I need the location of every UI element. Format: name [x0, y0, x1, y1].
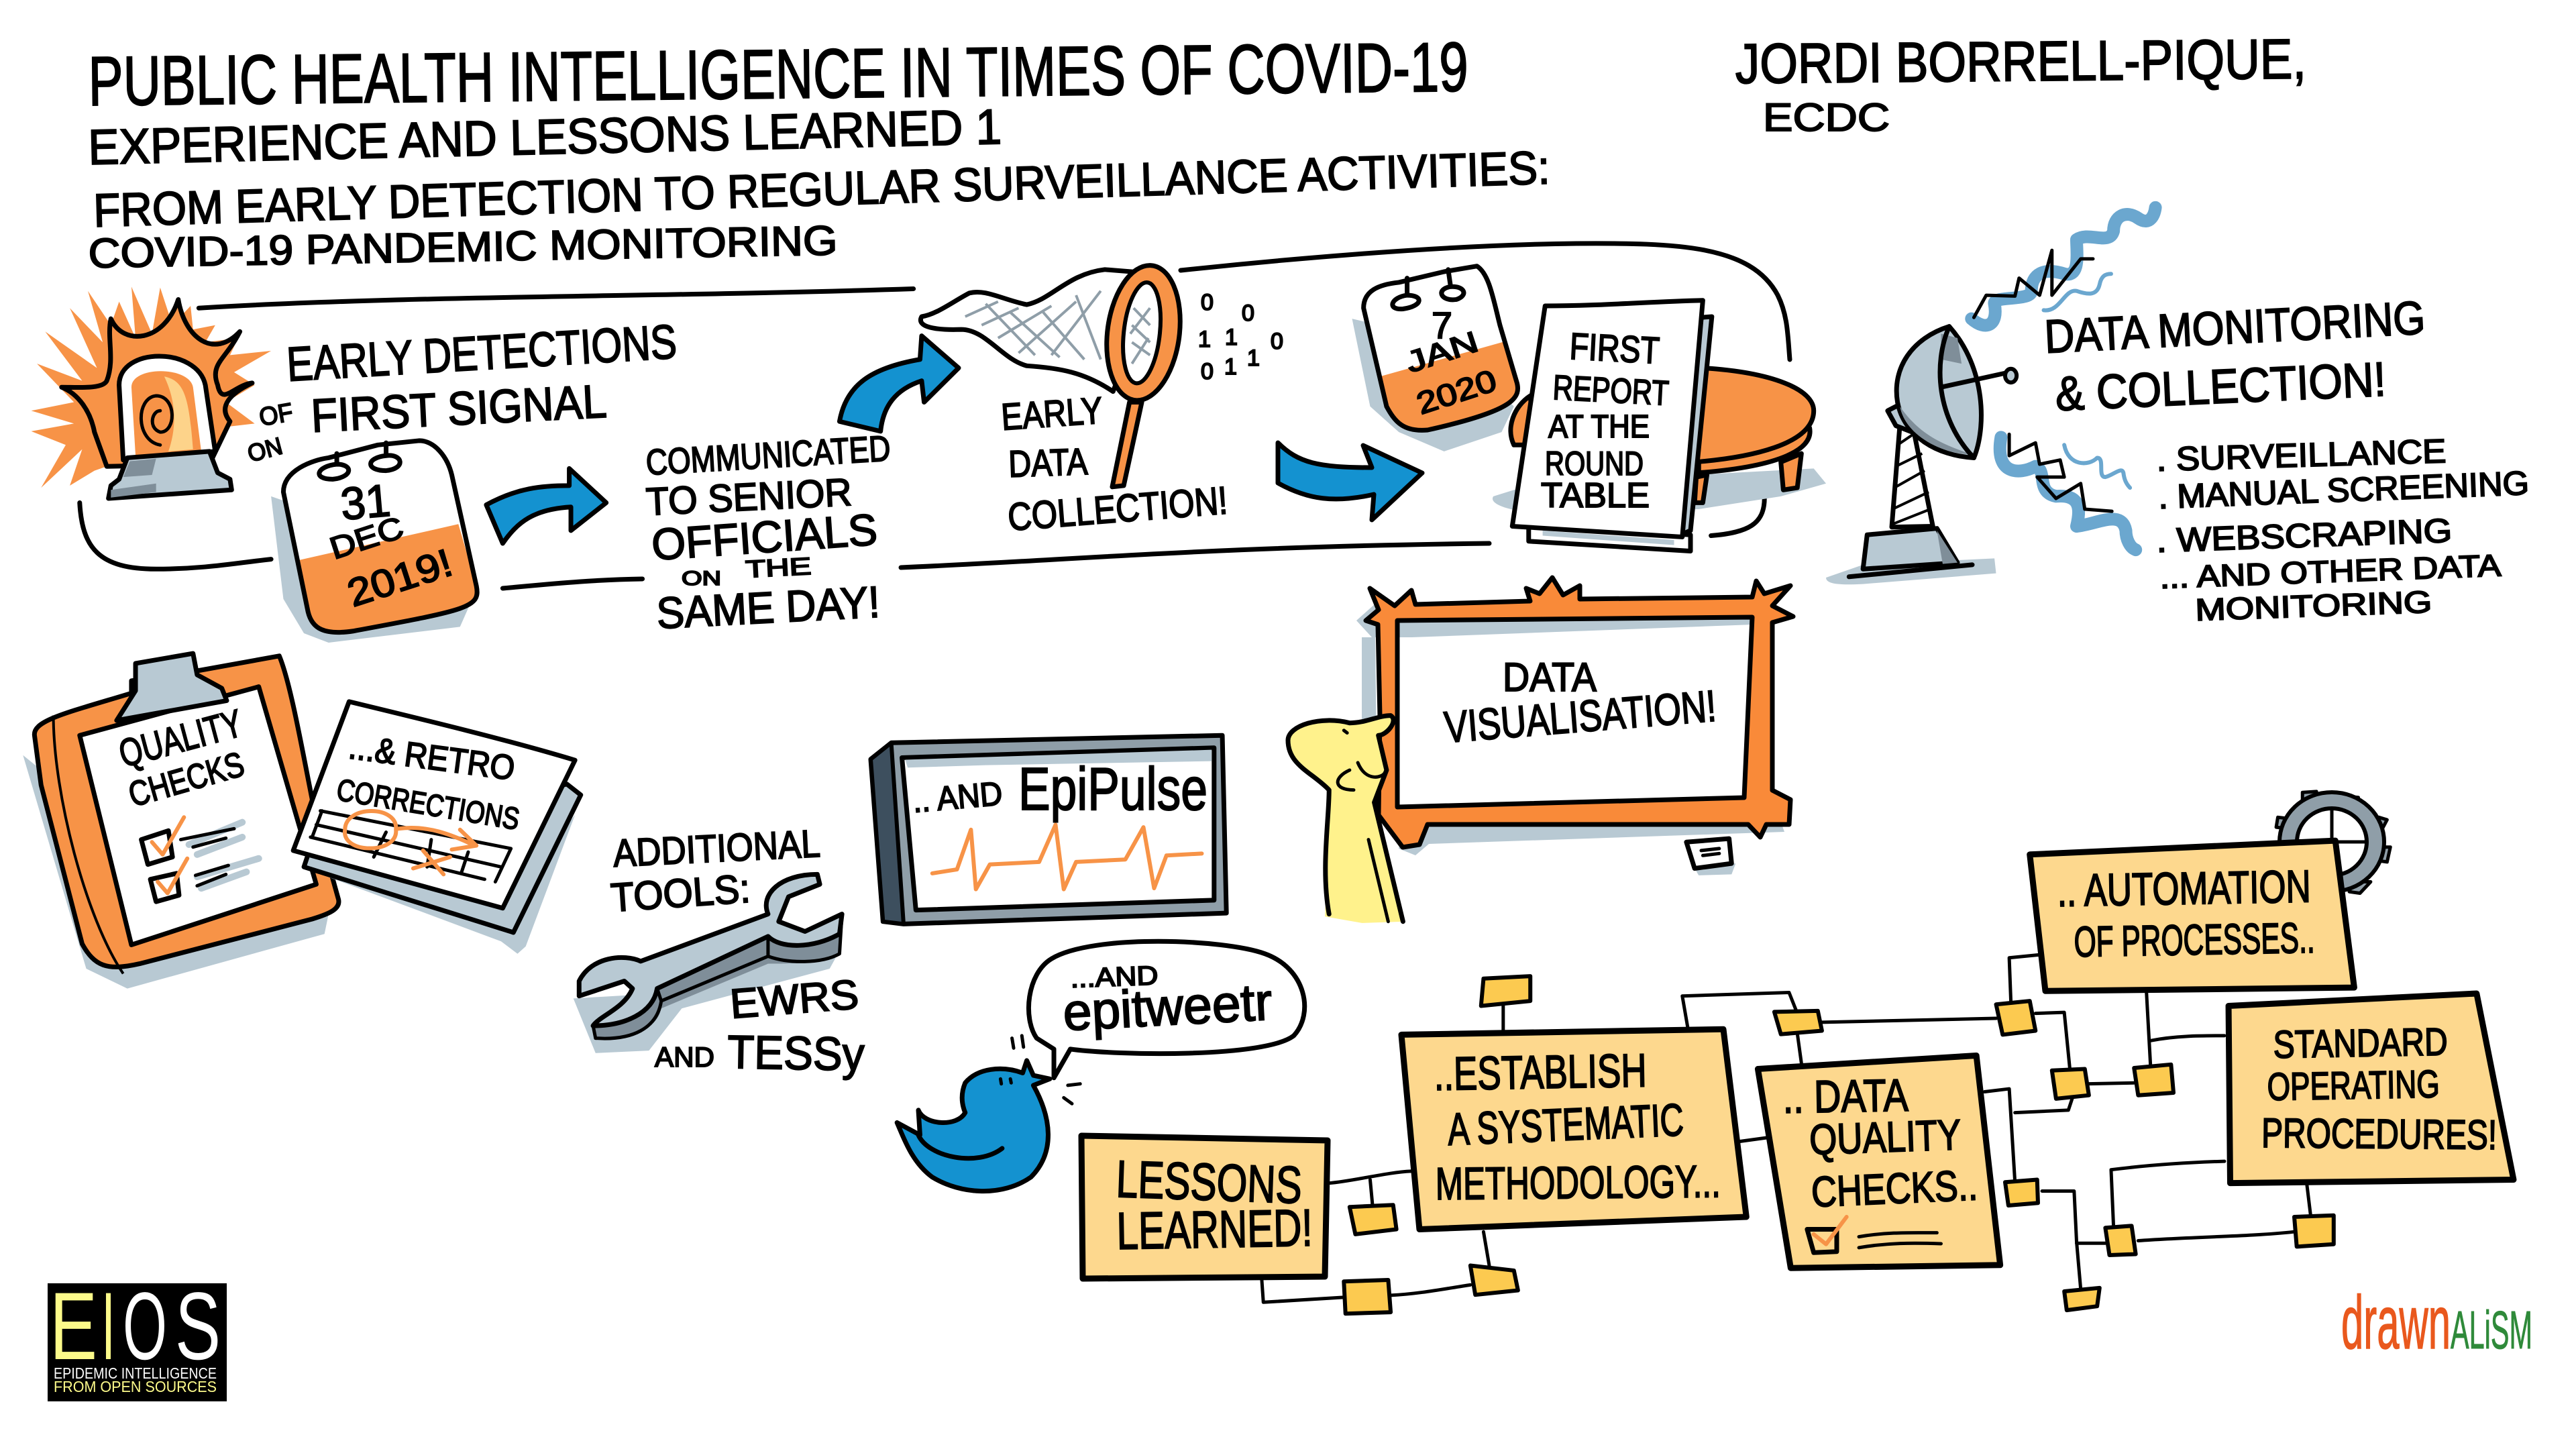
text: communicated to senior officials	[645, 428, 892, 638]
box: automation of processes: .. AUTOMATION	[2057, 861, 2311, 916]
icon: butterfly net with data: 1	[1198, 327, 1211, 352]
text: additional tools: ADDITIONAL	[612, 822, 821, 875]
speech bubble: epitweetr: ...AND	[1070, 961, 1159, 994]
box: standard operating procedures	[2229, 994, 2514, 1183]
icon: calendar 31 Dec 2019: 31	[339, 475, 392, 530]
icon: butterfly net with data: 0	[1242, 301, 1254, 326]
text: early detections of first signal: ON	[244, 432, 285, 468]
icon: person looking at frame	[1288, 716, 1405, 923]
icon: alarm light	[32, 286, 271, 498]
icon: wrench	[574, 874, 842, 1053]
icon: butterfly net with data: 0	[1271, 329, 1283, 354]
icon: small note under frame	[1686, 839, 1735, 875]
icon: butterfly net with data: 1	[1224, 354, 1237, 380]
logo: EIOS: FROM OPEN SOURCES	[54, 1378, 217, 1395]
author credit: ECDC	[1763, 96, 1890, 140]
box: establish a systematic methodology: A SYSTEMATIC	[1446, 1094, 1684, 1155]
icon: automation gear	[2276, 792, 2390, 894]
box: standard operating procedures: OPERATING	[2267, 1063, 2440, 1109]
logo: EIOS: E	[50, 1273, 97, 1380]
logo: drawnalism: drawn	[2341, 1281, 2451, 1364]
logo: EIOS	[48, 1273, 227, 1401]
box: lessons learned: LESSONS	[1115, 1149, 1303, 1215]
speech bubble: epitweetr	[1028, 941, 1305, 1078]
box: lessons learned	[1081, 1136, 1328, 1279]
text: early detections of first signal: OF	[257, 398, 295, 432]
icon: butterfly net with data: 0	[1201, 290, 1214, 315]
list: monitoring methods: . MANUAL SCREENING	[2157, 464, 2530, 516]
icon: tablet with EpiPulse: .. AND	[911, 774, 1004, 820]
list: monitoring methods: . SURVEILLANCE	[2156, 432, 2447, 478]
arrow: to communicated	[486, 468, 606, 543]
header: title block	[87, 28, 1550, 277]
icon: calendar 7 Jan 2020: 7	[1432, 304, 1452, 346]
first report at the round table: FIRST	[1568, 325, 1660, 372]
text: additional tools: TOOLS:	[609, 866, 751, 920]
text: early data collection	[1000, 389, 1229, 539]
logo: EIOS: EPIDEMIC INTELLIGENCE	[54, 1364, 217, 1382]
first report at the round table: REPORT	[1552, 368, 1670, 413]
small sticky notes	[1344, 976, 2334, 1313]
icon: clipboard quality checks	[23, 653, 339, 989]
icon: tablet with EpiPulse: EpiPulse	[1018, 756, 1208, 823]
subtitle: from early detection: FROM EARLY DETECTION TO REGULAR SURVEILLANCE ACTIVITIES:	[93, 142, 1550, 237]
data visualisation frame: VISUALISATION!	[1442, 681, 1718, 752]
text: early data collection: COLLECTION!	[1006, 478, 1229, 539]
box: establish a systematic methodology: METHODOLOGY...	[1435, 1156, 1721, 1210]
text: communicated to senior officials: SAME DAY!	[655, 577, 881, 638]
text: EWRS and TESSy	[655, 971, 865, 1081]
text: communicated to senior officials: TO SENIOR	[645, 470, 853, 524]
box: automation of processes: OF PROCESSES..	[2074, 914, 2315, 966]
icon: clipboard quality checks: CHECKS	[124, 745, 248, 815]
icon: calendar 7 Jan 2020	[1352, 266, 1518, 451]
list: monitoring methods	[2155, 432, 2530, 627]
text: early detections of first signal: FIRST SIGNAL	[310, 375, 608, 442]
box: automation of processes	[2030, 841, 2354, 991]
data visualisation frame: DATA	[1503, 655, 1597, 700]
icon: calendar 31 Dec 2019: DEC	[325, 509, 408, 566]
title: PUBLIC HEALTH INTELLIGENCE IN TIMES OF COVID-19	[88, 28, 1468, 121]
icon: clipboard quality checks: QUALITY	[115, 701, 247, 776]
text: communicated to senior officials: OFFICIALS	[650, 504, 879, 570]
text: data monitoring and collection	[2043, 291, 2426, 421]
timeline connector lines	[80, 244, 1790, 588]
arrow: to early data collection	[839, 336, 959, 431]
icon: tablet with EpiPulse	[871, 735, 1226, 924]
icon: butterfly net with data: 1	[1247, 345, 1260, 371]
text: communicated to senior officials: COMMUNICATED	[645, 428, 892, 483]
text: early detections of first signal: EARLY DETECTIONS	[285, 315, 678, 392]
speech bubble: epitweetr: epitweetr	[1061, 972, 1273, 1042]
text: early detections of first signal	[244, 315, 678, 468]
text: EWRS and TESSy: AND	[655, 1041, 714, 1073]
icon: retro corrections sheet: CORRECTIONS	[334, 772, 522, 837]
author credit: JORDI BORRELL-PIQUE,	[1735, 28, 2306, 95]
list: monitoring methods: ... AND OTHER DATA	[2159, 547, 2502, 595]
arrow: blue arrow to report	[1278, 443, 1422, 520]
data visualisation frame	[1356, 578, 1793, 855]
list: monitoring methods: . WEBSCRAPING	[2155, 512, 2453, 559]
icon: twitter bird	[897, 1036, 1080, 1191]
subtitle: pandemic monitoring: COVID-19 PANDEMIC MONITORING	[88, 218, 838, 277]
icon: calendar 31 Dec 2019: 2019!	[342, 541, 458, 615]
text: communicated to senior officials: THE	[745, 552, 812, 583]
text: EWRS and TESSy: EWRS	[729, 971, 861, 1028]
text: data monitoring and collection: & COLLECTION!	[2054, 353, 2387, 421]
logo: EIOS: I	[101, 1273, 115, 1380]
text: EWRS and TESSy: TESSy	[727, 1026, 865, 1081]
first report at the round table: ROUND	[1545, 445, 1644, 482]
list: monitoring methods: MONITORING	[2195, 584, 2432, 627]
box: data quality checks	[1758, 1056, 2000, 1268]
text: additional tools	[609, 822, 821, 920]
box: data quality checks: QUALITY	[1809, 1110, 1962, 1164]
icon: calendar 7 Jan 2020: JAN	[1402, 325, 1483, 380]
icon: round table	[1493, 368, 1826, 513]
box: lessons learned: LEARNED!	[1116, 1198, 1313, 1260]
text: data monitoring and collection: DATA MONITORING	[2043, 291, 2426, 363]
box: establish a systematic methodology: ..ESTABLISH	[1434, 1044, 1647, 1100]
first report at the round table	[1512, 301, 1712, 551]
icon: butterfly net with data	[920, 264, 1283, 487]
icon: butterfly net with data: 0	[1201, 359, 1214, 384]
subtitle: experience and lessons learned: EXPERIENCE AND LESSONS LEARNED 1	[87, 99, 1002, 175]
connector lines between lessons boxes	[1262, 955, 2311, 1302]
box: data quality checks: CHECKS..	[1810, 1161, 1978, 1216]
box: standard operating procedures: STANDARD	[2273, 1020, 2448, 1067]
icon: calendar 7 Jan 2020: 2020	[1412, 362, 1501, 421]
author credit	[1735, 28, 2306, 140]
box: data quality checks: .. DATA	[1782, 1070, 1909, 1123]
icon: satellite dish with signal waves	[1826, 207, 2155, 584]
icon: retro corrections sheet	[293, 702, 581, 954]
icon: retro corrections sheet: ...& RETRO	[346, 727, 517, 788]
icon: calendar 31 Dec 2019	[271, 441, 477, 643]
text: communicated to senior officials: ON	[682, 568, 721, 590]
first report at the round table: AT THE	[1548, 409, 1650, 445]
box: establish a systematic methodology	[1401, 1029, 1746, 1229]
box: standard operating procedures: PROCEDURES!	[2261, 1110, 2497, 1159]
icon: butterfly net with data: 1	[1225, 325, 1238, 350]
logo: EIOS: S	[175, 1273, 221, 1380]
first report at the round table: TABLE	[1541, 476, 1650, 515]
text: early data collection: EARLY	[1000, 389, 1104, 438]
text: early data collection: DATA	[1008, 440, 1089, 485]
logo: EIOS: O	[123, 1273, 167, 1380]
